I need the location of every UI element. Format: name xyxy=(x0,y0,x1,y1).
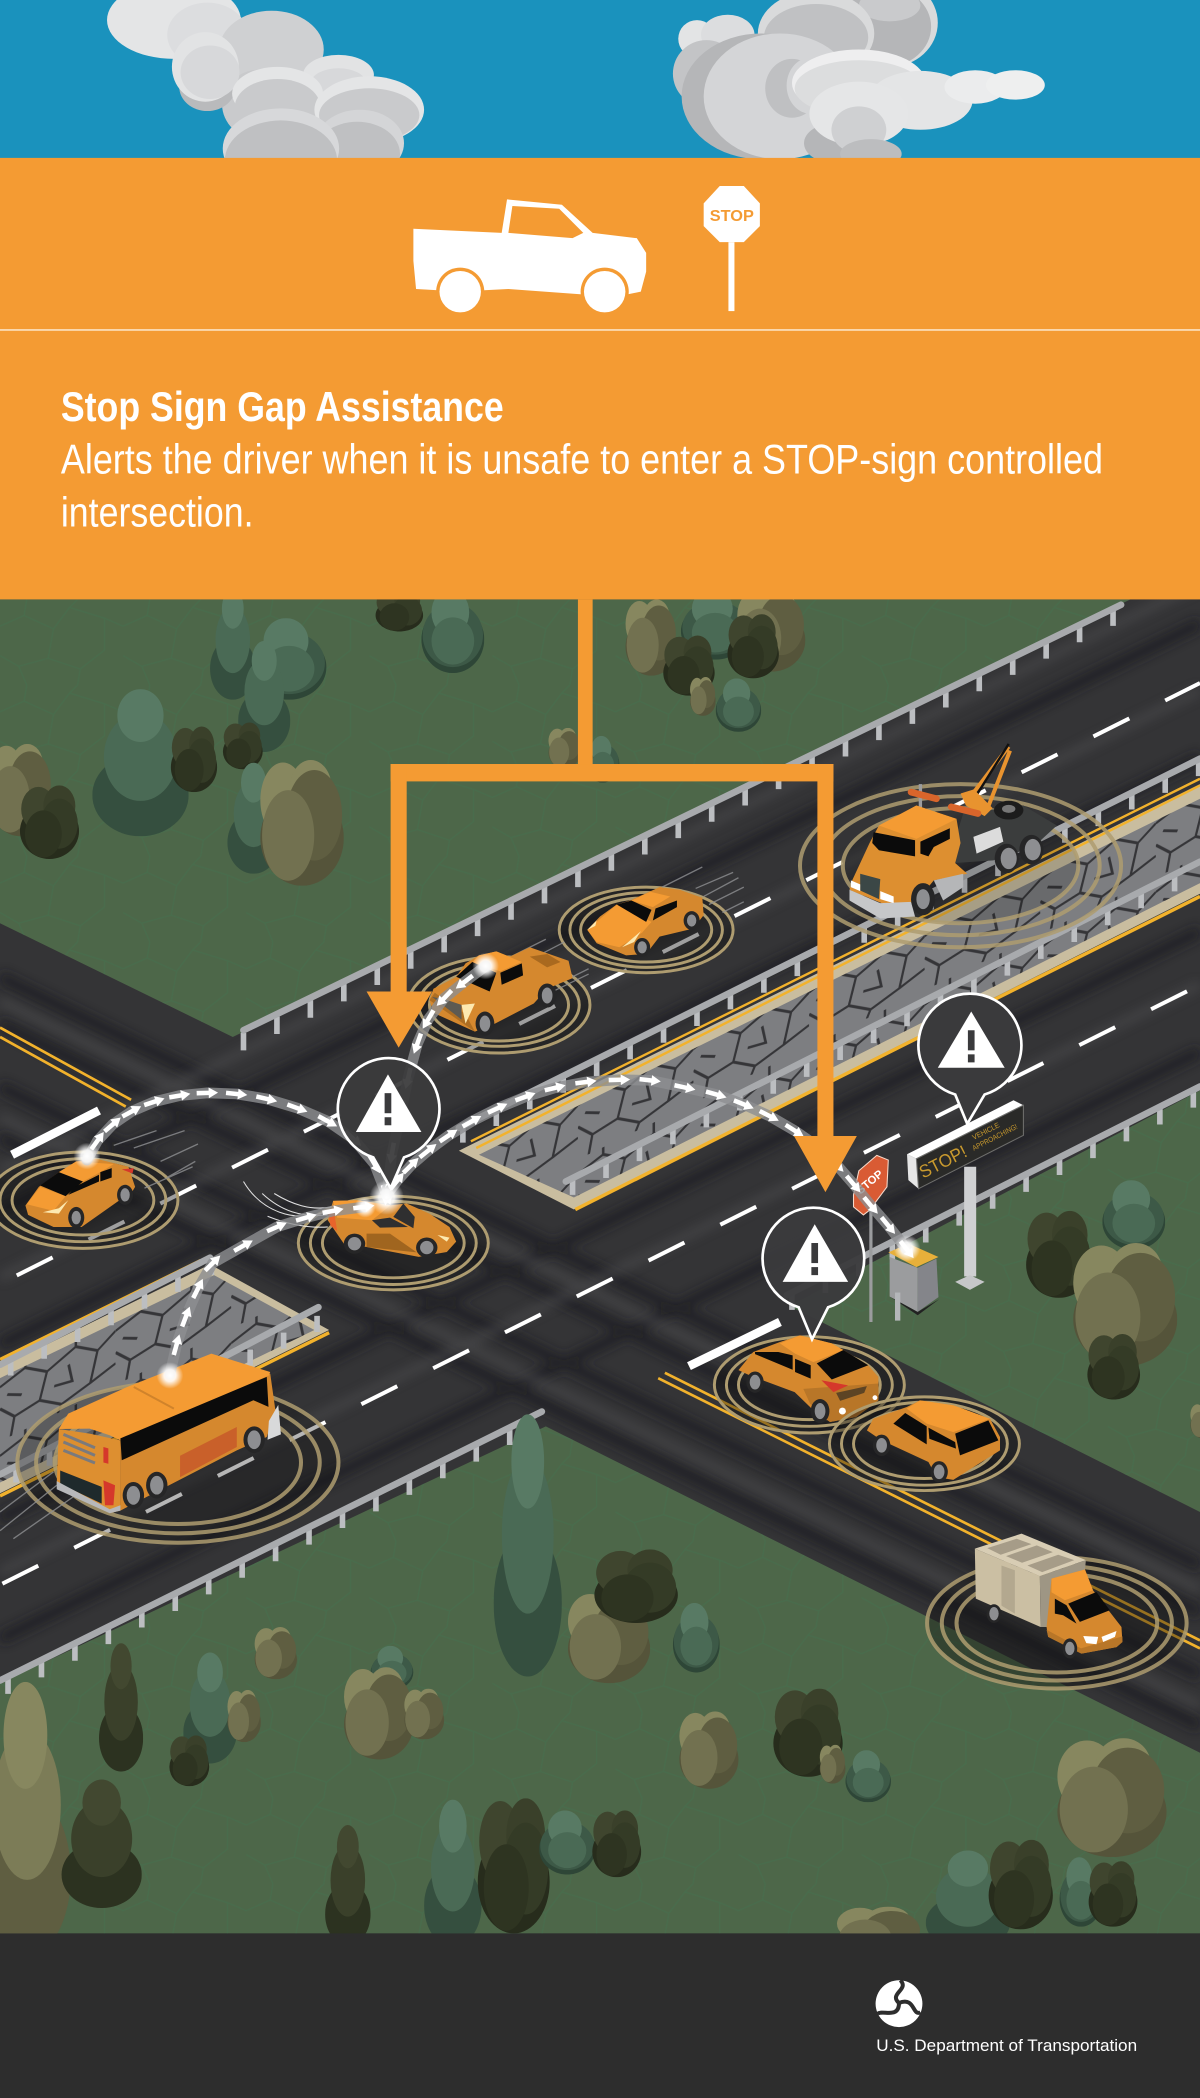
stop sign at intersection xyxy=(854,1155,888,1322)
icon: department of transportation logo xyxy=(876,1980,922,2027)
guard rail: upper xyxy=(243,605,1121,1050)
sky xyxy=(0,0,1200,159)
double yellow lines: cross road xyxy=(0,1028,1200,1648)
footer text: U.S. Department of Transportation xyxy=(876,2036,1137,2055)
lane markings xyxy=(0,683,1200,1585)
icon: stop sign: STOP xyxy=(710,207,754,225)
message sign: stop vehicle approaching: VEHICLE xyxy=(971,1120,1001,1142)
message sign: stop vehicle approaching: APPROACHING! xyxy=(971,1122,1019,1152)
icon: stop sign xyxy=(704,186,760,311)
warning pin: suv xyxy=(763,1208,864,1339)
median: lower left xyxy=(0,1260,329,1496)
description text xyxy=(61,436,1103,536)
signal glow points xyxy=(74,953,920,1389)
signal trail: bus to center car xyxy=(170,1207,364,1374)
cloud: right xyxy=(673,0,1045,169)
roadside unit xyxy=(888,1244,939,1321)
signal trail: pickup to center car xyxy=(387,966,486,1195)
trees: bottom xyxy=(0,1414,1167,1960)
stop sign at intersection: STOP xyxy=(854,1168,886,1197)
signal trail: center car to roadside unit xyxy=(387,1080,907,1250)
vehicle: suv at stop bar xyxy=(714,1335,904,1433)
trees: right xyxy=(1026,1180,1200,1438)
guard rail: left median upper xyxy=(0,1258,211,1375)
panel: orange header xyxy=(0,158,1200,599)
vehicle: bus xyxy=(0,1354,338,1543)
grass: right xyxy=(789,1090,1200,1512)
vehicle: suv behind xyxy=(829,1397,1019,1491)
guard rail: left median lower xyxy=(0,1307,318,1483)
signal trail: left car to center car xyxy=(87,1093,387,1195)
guard rail: median upper xyxy=(459,759,1200,1143)
road highlight bands xyxy=(0,583,1200,1706)
divider line xyxy=(0,329,1200,331)
message sign: stop vehicle approaching: STOP! xyxy=(916,1141,970,1182)
vehicle: left car xyxy=(0,1131,198,1248)
vehicle: center car xyxy=(243,1181,488,1290)
stop bars xyxy=(12,1111,780,1366)
guard rail: right xyxy=(787,1086,1200,1310)
guard rail: median lower xyxy=(566,862,1200,1195)
vehicle: sports car top xyxy=(559,867,744,973)
vehicle: pickup xyxy=(408,939,590,1053)
heading: Stop Sign Gap Assistance xyxy=(61,383,504,430)
road surface xyxy=(0,599,1200,1933)
map: intersection scene xyxy=(0,583,1200,1960)
trees: upper left xyxy=(0,589,805,886)
guard rail: bottom xyxy=(0,1412,542,1694)
grass: bottom xyxy=(0,1426,1200,1933)
grass: upper left xyxy=(0,599,1130,1037)
vehicle: delivery truck xyxy=(927,1534,1187,1689)
cloud: left xyxy=(107,0,424,201)
orange connector arrows xyxy=(367,599,857,1192)
warning pin: center car xyxy=(338,1058,439,1188)
warning pin: message sign xyxy=(918,994,1021,1124)
road shading bands xyxy=(0,624,1200,1726)
description text: intersection. xyxy=(61,489,254,536)
icon: pickup truck xyxy=(413,199,646,316)
vehicle: tow truck xyxy=(800,744,1121,947)
panel: footer xyxy=(0,1933,1200,2098)
median: upper right xyxy=(459,779,1200,1210)
message sign: stop vehicle approaching xyxy=(907,1100,1023,1290)
